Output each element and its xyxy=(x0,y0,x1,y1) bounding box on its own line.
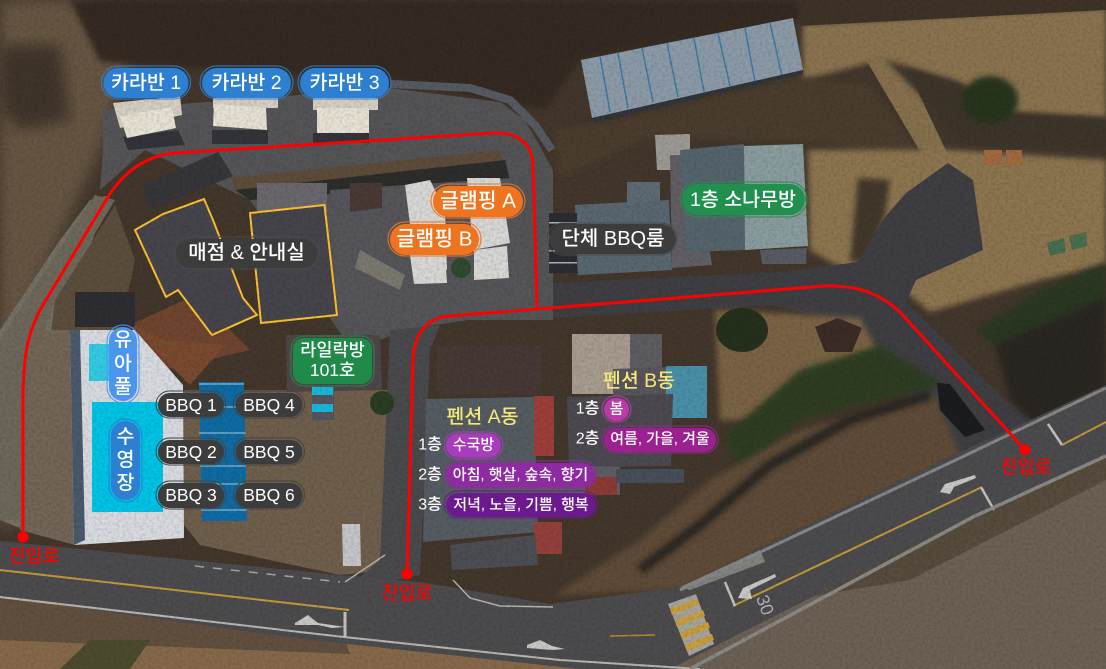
wooden deck xyxy=(133,325,225,385)
label: swimming pool xyxy=(109,419,142,502)
pension A floor 1 label: 1층 xyxy=(418,436,442,454)
label: BBQ 1 xyxy=(156,391,226,418)
courtyard xyxy=(330,178,535,330)
label: glamping A: 글램핑 A xyxy=(440,190,516,212)
hedge band xyxy=(885,60,1106,150)
label: BBQ 4 xyxy=(234,391,304,418)
swimming pool xyxy=(92,402,163,512)
caravan lot and driveway xyxy=(100,88,553,340)
glamping tents xyxy=(405,178,510,284)
label: BBQ 3 xyxy=(156,481,226,509)
entrance route centre and east xyxy=(402,286,1030,580)
caravan 1 xyxy=(113,96,185,150)
caravan 3 xyxy=(313,98,378,143)
pension B heading: 펜션 B동 xyxy=(603,370,675,392)
label: kids pool: 풀 xyxy=(114,376,132,398)
rock pile xyxy=(680,550,765,590)
pension A floor 3 label: 3층 xyxy=(418,496,442,514)
lower fields xyxy=(0,595,670,669)
parked car xyxy=(342,524,361,566)
pension A heading: 펜션 A동 xyxy=(446,406,519,428)
label: glamping B: 글램핑 B xyxy=(397,228,472,250)
pension B floor 1 label: 1층 xyxy=(576,400,599,418)
pension B floor 1 room xyxy=(602,396,631,422)
label: swimming pool: 영 xyxy=(117,449,134,471)
pension B floor 2 label: 2층 xyxy=(576,430,599,448)
BBQ blue tunnel xyxy=(199,382,247,521)
garden plot xyxy=(715,310,885,420)
label: swimming pool: 장 xyxy=(117,472,135,494)
label: BBQ 2: BBQ 2 xyxy=(165,442,217,462)
lilac building roof xyxy=(286,335,382,392)
pension A floor 2 rooms: 아침, 햇살, 숲속, 향기 xyxy=(453,466,588,484)
pension A floor 1 room: 수국방 xyxy=(453,436,494,454)
road markings xyxy=(0,388,1106,669)
greenhouse xyxy=(581,18,803,123)
gazebo xyxy=(815,318,862,352)
label: caravan 2: 카라반 2 xyxy=(211,72,282,94)
pension A floor 2 rooms xyxy=(444,461,597,488)
pension B floor 1 room: 봄 xyxy=(610,400,624,418)
pension A floor 1 room xyxy=(444,432,503,459)
label: shop and information xyxy=(174,237,319,269)
label: BBQ 6: BBQ 6 xyxy=(243,485,295,505)
label: glamping A xyxy=(431,184,525,218)
label: group BBQ room: 단체 BBQ룸 xyxy=(562,227,664,250)
tree band xyxy=(725,345,945,470)
pension B floor 2 rooms: 여름, 가을, 겨울 xyxy=(610,430,710,448)
kids pool xyxy=(89,344,109,381)
stream slope xyxy=(555,395,960,595)
label: kids pool xyxy=(107,325,139,403)
vertical driveway xyxy=(345,325,440,590)
label: BBQ 4: BBQ 4 xyxy=(243,395,295,415)
road arrows xyxy=(295,475,976,650)
left hillside xyxy=(0,0,130,530)
upper forest xyxy=(70,0,800,110)
label: BBQ 3: BBQ 3 xyxy=(165,485,217,505)
dark garden shrubs xyxy=(555,78,925,178)
pool-side ground xyxy=(20,330,75,545)
label: group BBQ room xyxy=(547,223,677,255)
label: kids pool: 유 xyxy=(114,329,132,351)
pension A floor 2 label: 2층 xyxy=(418,466,442,484)
caravan 2 xyxy=(212,98,278,144)
label: lilac room 101 xyxy=(291,336,374,386)
lower-right grass xyxy=(808,150,1106,312)
entrance label east: 진입로 xyxy=(1000,456,1052,478)
dark creek along the slope xyxy=(640,395,930,570)
concrete channel xyxy=(937,383,985,437)
label: caravan 2 xyxy=(200,66,293,99)
label: shop and information: 매점 & 안내실 xyxy=(188,241,305,264)
label: BBQ 2 xyxy=(156,438,226,465)
picnic tables xyxy=(984,150,1087,256)
green trees xyxy=(975,262,1106,350)
label: caravan 1 xyxy=(102,66,190,99)
label: 1F pine room xyxy=(680,182,807,217)
stone retaining wall xyxy=(391,84,552,150)
garden shrub bed xyxy=(850,178,890,262)
label: kids pool: 아 xyxy=(114,353,132,375)
entrance route from left xyxy=(18,133,537,542)
pension B floor 2 rooms xyxy=(602,426,718,453)
upper-right grass xyxy=(803,8,1106,118)
label: BBQ 5: BBQ 5 xyxy=(243,442,295,462)
pension B building xyxy=(567,334,707,483)
east gully xyxy=(995,298,1106,425)
entrance label left: 진입로 xyxy=(8,546,60,566)
crosswalk xyxy=(668,594,714,656)
pool deck xyxy=(70,330,184,545)
label: lilac room 101: 라일락방 xyxy=(300,340,365,360)
label: 1F pine room: 1층 소나무방 xyxy=(690,189,796,211)
label: glamping B xyxy=(388,222,481,256)
east road and lot xyxy=(553,163,1040,455)
label: caravan 1: 카라반 1 xyxy=(111,72,181,94)
sonamu building xyxy=(627,134,808,268)
entrance label centre: 진입로 xyxy=(381,582,433,604)
pension A floor 3 rooms: 저녁, 노을, 기쁨, 행복 xyxy=(453,496,589,514)
slope below the caravan lot xyxy=(230,150,505,195)
label: caravan 3: 카라반 3 xyxy=(309,72,380,94)
label: BBQ 1: BBQ 1 xyxy=(165,395,217,415)
shop buildings xyxy=(75,152,382,370)
road speed marking: 30 xyxy=(752,592,778,618)
pension A building xyxy=(423,346,620,570)
label: BBQ 6 xyxy=(234,481,304,509)
group BBQ building xyxy=(549,200,672,275)
label: lilac room 101: 101호 xyxy=(310,360,355,380)
label: swimming pool: 수 xyxy=(117,426,134,448)
main road xyxy=(0,385,1106,669)
label: caravan 3 xyxy=(298,66,391,99)
label: BBQ 5 xyxy=(234,438,304,465)
pension A floor 3 rooms xyxy=(444,491,598,518)
